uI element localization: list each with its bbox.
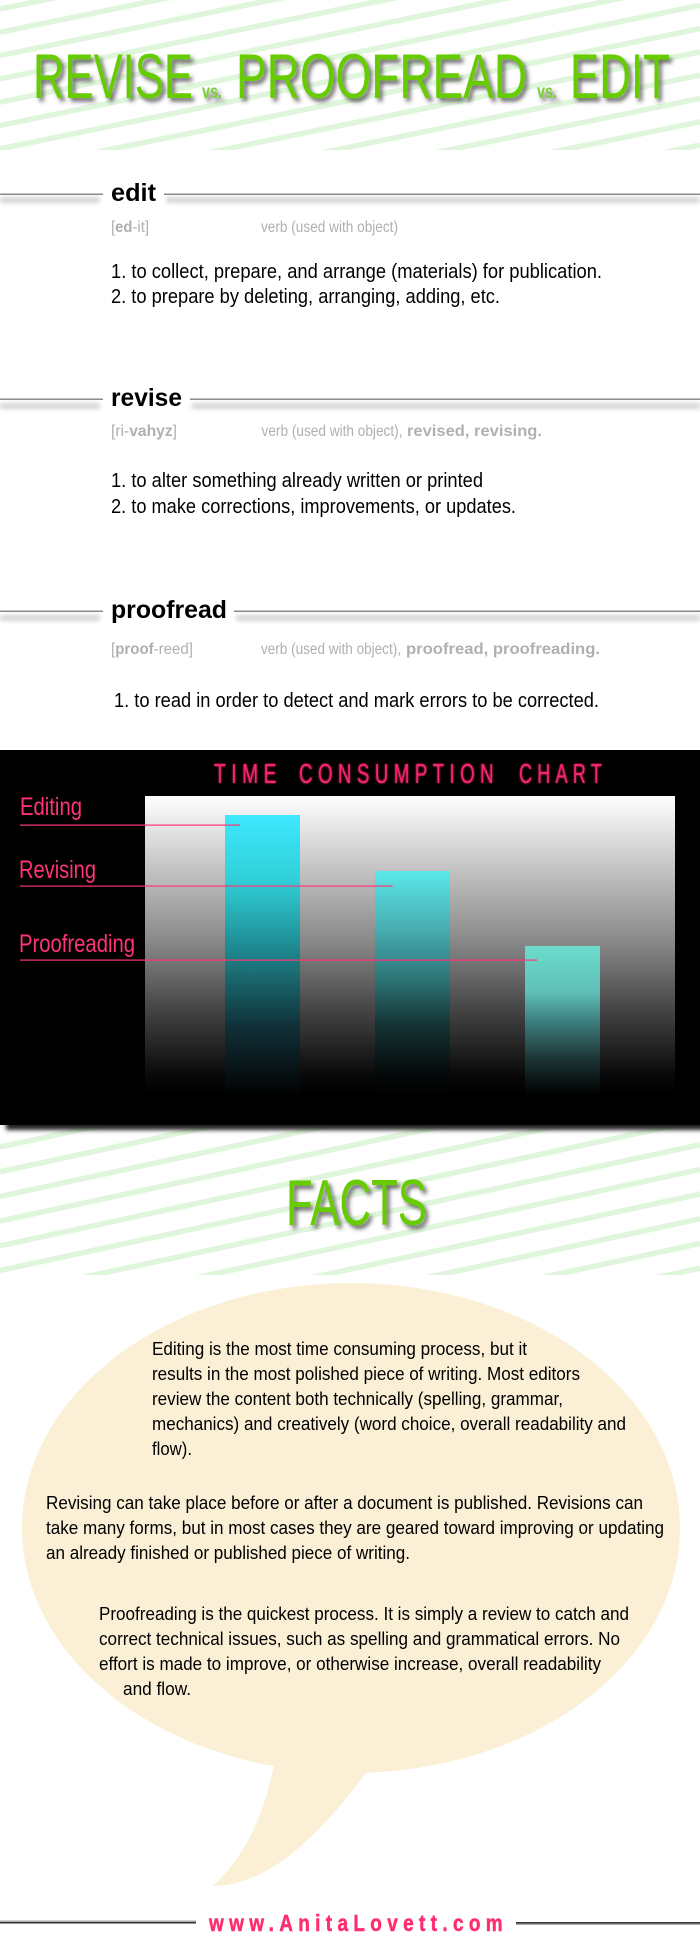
definition: edit: 1. to collect, prepare, and arrange (materials) for publication. bbox=[111, 261, 602, 283]
definition: revise: 2. to make corrections, improvements, or updates. bbox=[111, 496, 516, 518]
definition: proofread: proofread bbox=[111, 596, 227, 624]
definition: revise: verb (used with object), bbox=[262, 423, 402, 440]
title: PROOFREAD bbox=[236, 42, 527, 112]
fact: revising: take many forms, but in most cases they are geared toward improving or updating bbox=[46, 1518, 664, 1538]
fact: proofreading bbox=[99, 1604, 629, 1699]
fact: editing: Editing is the most time consuming process, but it bbox=[152, 1339, 527, 1359]
footer website: www.AnitaLovett.com bbox=[208, 1910, 508, 1936]
title: vs. bbox=[202, 82, 222, 103]
definition: proofread: proofread, proofreading. bbox=[406, 641, 600, 658]
chart title: CONSUMPTION bbox=[299, 758, 499, 789]
title: vs. bbox=[537, 82, 557, 103]
chart title: CHART bbox=[519, 758, 607, 789]
definition: proofread bbox=[0, 596, 700, 712]
definition: revise: revised, revising. bbox=[407, 423, 542, 440]
fact: proofreading: and flow. bbox=[123, 1679, 191, 1699]
label: editing: Editing bbox=[20, 793, 82, 821]
chart title: TIME bbox=[214, 758, 282, 789]
title bbox=[33, 42, 670, 112]
fact: editing: mechanics) and creatively (word choice, overall readability and bbox=[152, 1414, 626, 1434]
striped facts background bbox=[0, 1128, 700, 1275]
fact: revising bbox=[46, 1493, 664, 1563]
fact: editing: flow). bbox=[152, 1439, 192, 1459]
fact: revising: an already finished or published piece of writing. bbox=[46, 1543, 410, 1563]
definition: edit: [ed-it] bbox=[111, 219, 149, 236]
definition: revise: 1. to alter something already written or printed bbox=[111, 470, 483, 492]
label: proofreading: Proofreading bbox=[19, 930, 135, 958]
label: revising: Revising bbox=[19, 856, 96, 884]
fact: proofreading: Proofreading is the quickest process. It is simply a review to catch and bbox=[99, 1604, 629, 1624]
panel: time consumption chart bbox=[0, 750, 700, 1130]
fact: revising: Revising can take place before or after a document is published. Revisions can bbox=[46, 1493, 643, 1513]
definition: edit: verb (used with object) bbox=[261, 219, 398, 236]
bar: editing bbox=[225, 815, 300, 1097]
striped header background bbox=[0, 0, 700, 150]
title: REVISE bbox=[33, 42, 193, 112]
heading: facts: FACTS bbox=[286, 1166, 427, 1239]
definition: edit bbox=[0, 179, 700, 308]
definition: proofread: [proof-reed] bbox=[111, 641, 193, 658]
definition: proofread: 1. to read in order to detect and mark errors to be corrected. bbox=[114, 690, 599, 712]
bar: revising bbox=[375, 871, 450, 1097]
definition: proofread: verb (used with object), bbox=[261, 641, 401, 658]
plot area bbox=[145, 796, 675, 1094]
speech bubble bbox=[22, 1283, 680, 1886]
fact: editing: review the content both technically (spelling, grammar, bbox=[152, 1389, 563, 1409]
definition: revise: revise bbox=[111, 384, 182, 412]
definition: revise: [ri-vahyz] bbox=[111, 423, 177, 440]
bar: proofreading bbox=[525, 946, 600, 1097]
fact: editing bbox=[152, 1339, 626, 1459]
definition: edit: edit bbox=[111, 179, 157, 207]
fact: proofreading: correct technical issues, such as spelling and grammatical errors. No bbox=[99, 1629, 620, 1649]
fact: editing: results in the most polished piece of writing. Most editors bbox=[152, 1364, 580, 1384]
fact: proofreading: effort is made to improve, or otherwise increase, overall readability bbox=[99, 1654, 601, 1674]
definition: edit: 2. to prepare by deleting, arranging, adding, etc. bbox=[111, 286, 500, 308]
definition: revise bbox=[0, 384, 700, 518]
